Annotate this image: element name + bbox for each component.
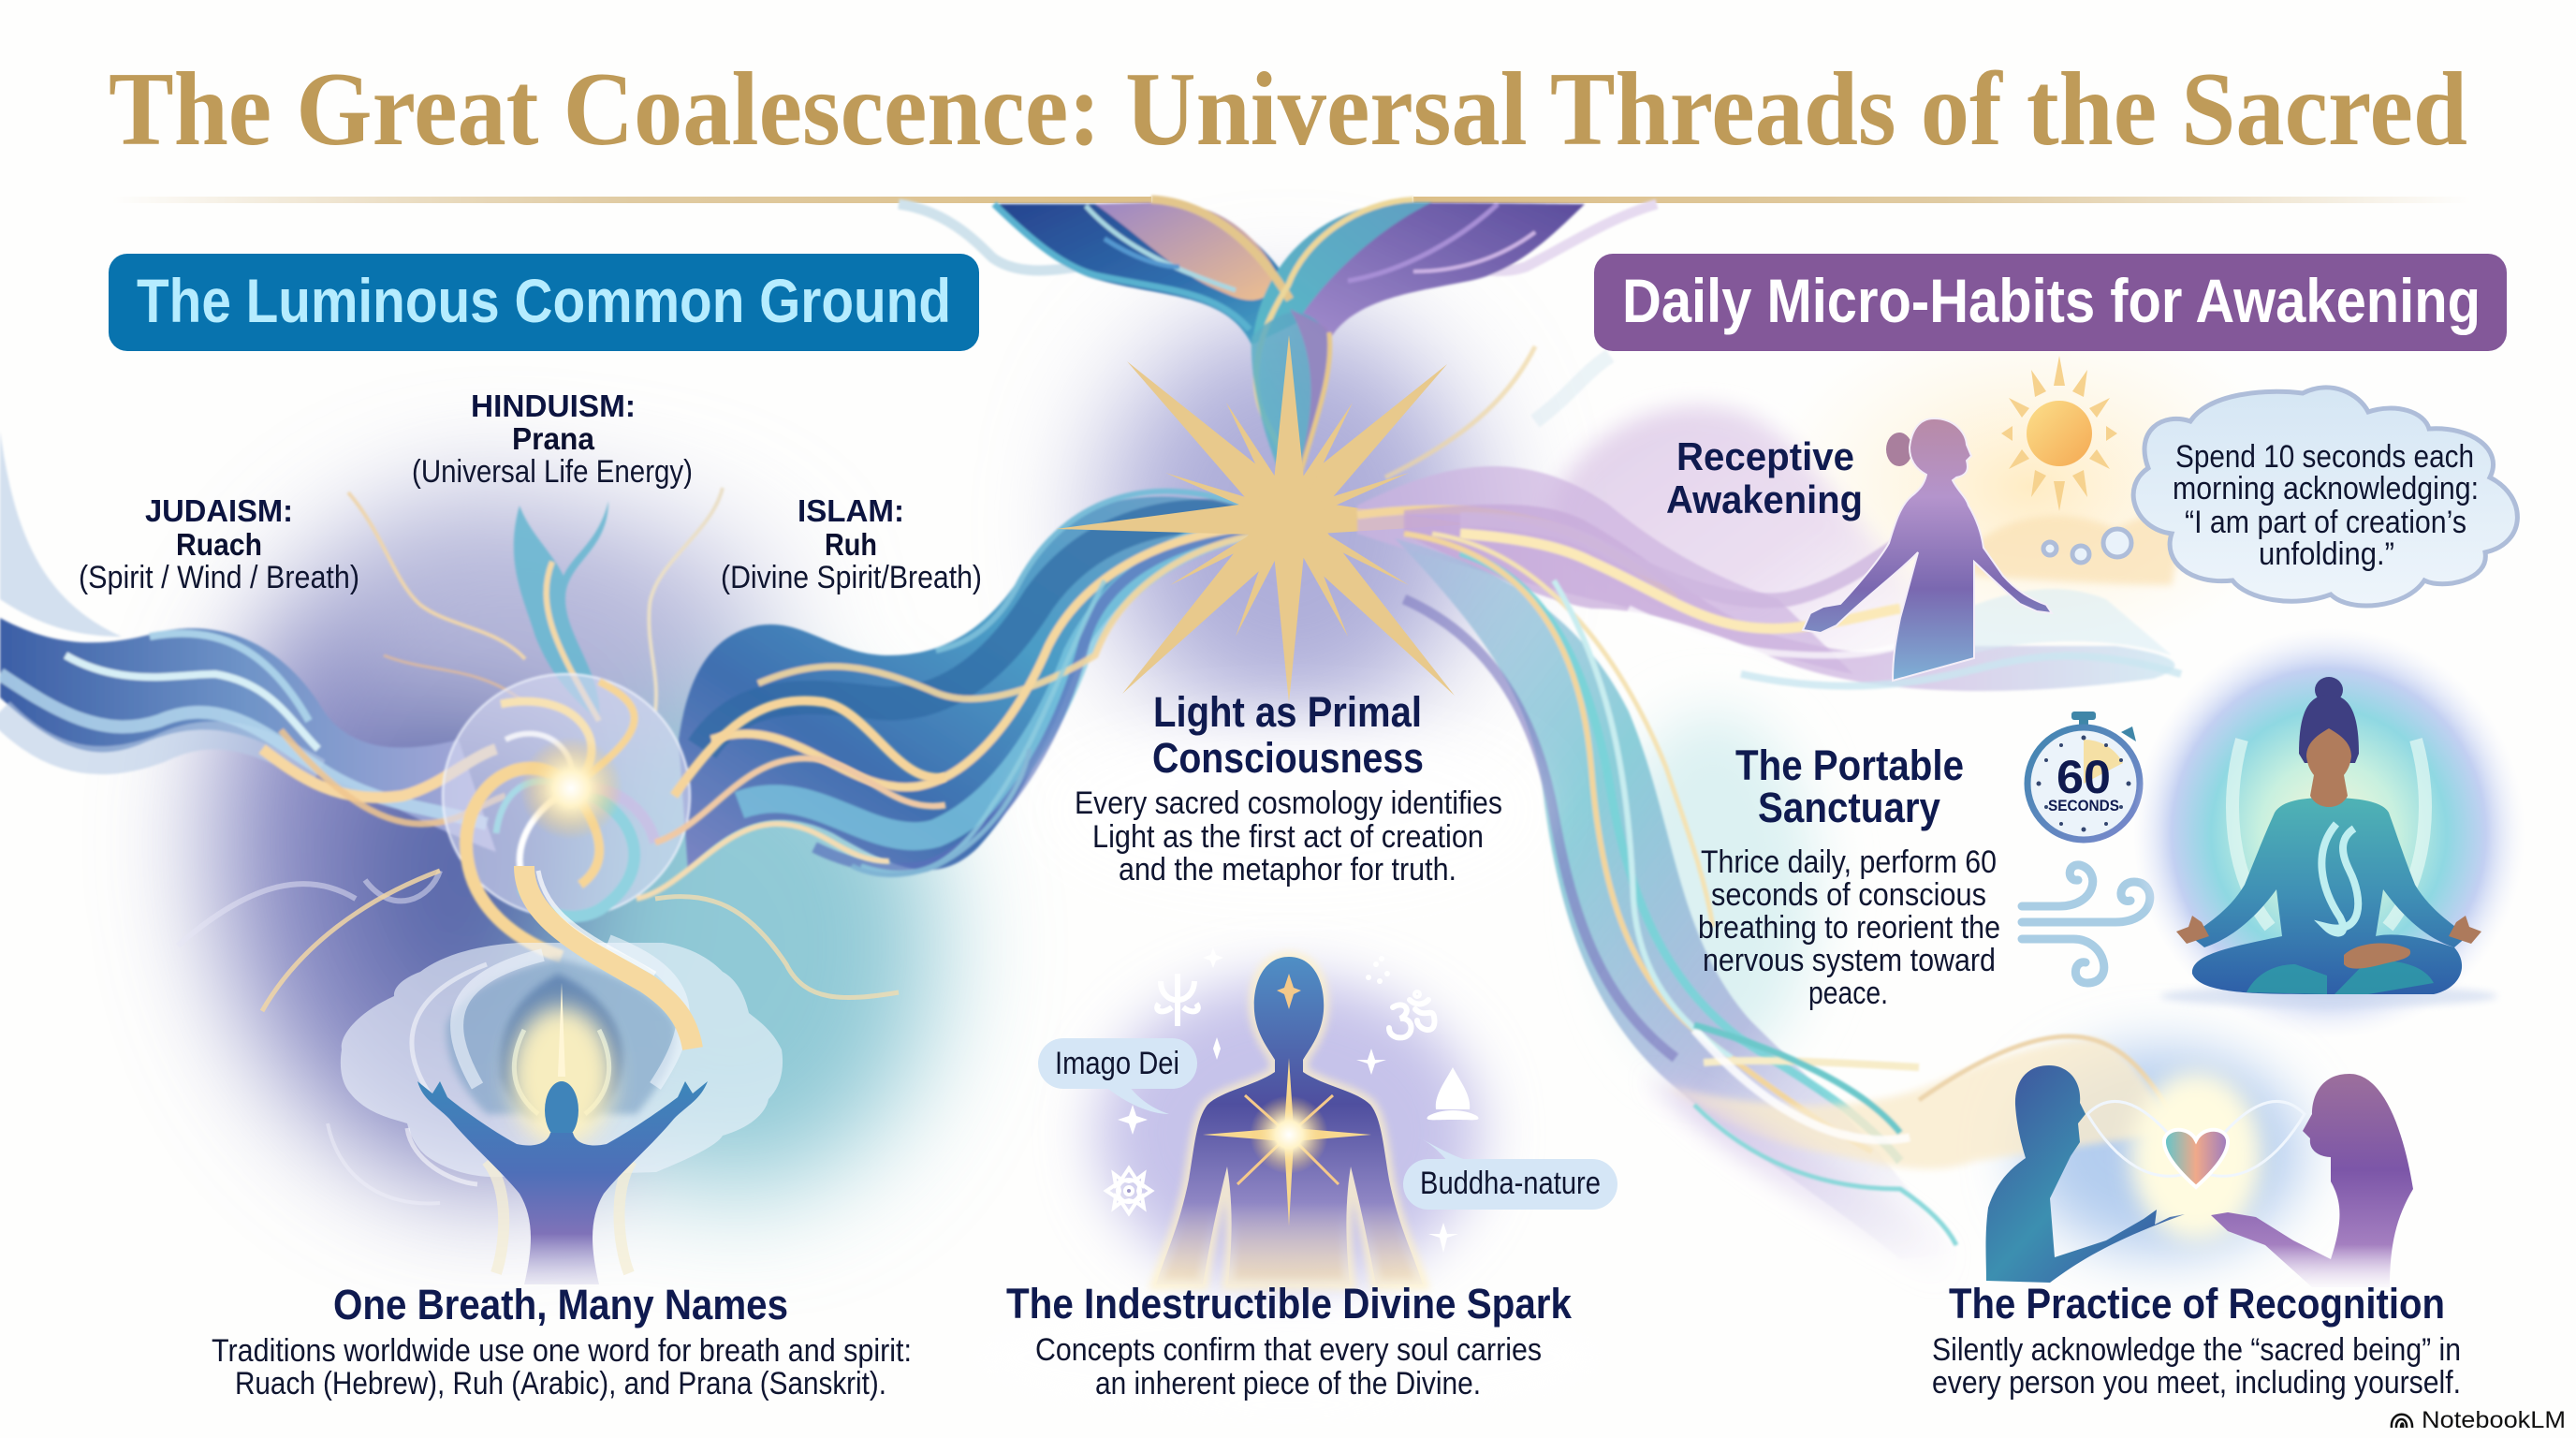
heading: receptive awakening: Awakening xyxy=(1666,477,1863,521)
text block: portable sanctuary: nervous system toward xyxy=(1703,943,1996,978)
icon: heart xyxy=(2164,1130,2228,1187)
text block: practice of recognition xyxy=(1932,1280,2461,1401)
text block: portable sanctuary: Thrice daily, perform 60 xyxy=(1701,844,1997,880)
label: Hinduism: Prana xyxy=(512,421,595,456)
text block: light as primal consciousness xyxy=(1075,688,1502,888)
callout: thought cloud: morning acknowledging: xyxy=(2173,471,2479,506)
callout: Buddha-nature xyxy=(1403,1137,1617,1210)
label: Hinduism: HINDUISM: xyxy=(471,389,636,423)
background glow: left breath panel xyxy=(215,496,936,1189)
icon: forehead star xyxy=(1277,974,1301,1009)
icon: meditating figure xyxy=(2132,627,2525,1039)
label: Islam: ISLAM: xyxy=(798,493,904,528)
icon: sun xyxy=(2001,356,2117,511)
icon: recognition heart with two figures xyxy=(1986,1065,2413,1287)
icon: figure with raised arms xyxy=(417,983,708,1284)
text block: divine spark: The Indestructible Divine Spark xyxy=(1006,1280,1573,1328)
background glow: recognition xyxy=(2022,1049,2303,1255)
central star of light xyxy=(1056,335,1471,703)
icon: man silhouette xyxy=(1986,1065,2185,1283)
ribbons: top woven threads converging xyxy=(899,199,1657,496)
text block: one breath many names: Traditions worldwide use one word for breath and spirit: xyxy=(212,1333,912,1369)
text block: divine spark xyxy=(980,1280,1598,1414)
icon: connecting energy loops xyxy=(2087,1101,2305,1176)
label: Islam: (Divine Spirit/Breath) xyxy=(721,560,982,595)
ribbons: flow into recognition xyxy=(1647,1025,2172,1287)
gold divider line xyxy=(112,197,2471,203)
panel: divine spark xyxy=(980,947,1617,1414)
background glow: sanctuary teal wash xyxy=(1610,712,1816,1067)
label: Hinduism: (Universal Life Energy) xyxy=(412,454,693,490)
veils: breath cloud around figure xyxy=(178,866,899,1273)
heading: receptive awakening: Receptive xyxy=(1676,434,1854,478)
text block: one breath many names: Ruach (Hebrew), Ruh (Arabic), and Prana (Sanskrit). xyxy=(235,1366,886,1401)
label: Islam xyxy=(721,493,982,595)
text block: portable sanctuary: Sanctuary xyxy=(1758,784,1940,831)
heading: receptive awakening xyxy=(1666,434,1863,521)
icon: woman silhouette xyxy=(2211,1074,2413,1287)
icon: 60 second stopwatch: 60 xyxy=(2056,751,2111,803)
label: Judaism xyxy=(79,493,359,595)
swirl of breath xyxy=(443,674,945,957)
label: Hinduism xyxy=(412,389,693,490)
ribbons: star out to right xyxy=(1357,346,1928,674)
background glow: inner spark xyxy=(1097,978,1481,1287)
panel: luminous common ground xyxy=(79,254,982,1401)
text block: light as primal consciousness: and the metaphor for truth. xyxy=(1119,852,1456,888)
text block: divine spark: an inherent piece of the Divine. xyxy=(1095,1366,1481,1401)
label: Judaism: JUDAISM: xyxy=(145,493,293,528)
wash: lavender sky behind receptive awakening xyxy=(1551,406,1928,674)
icon: human figure xyxy=(1156,957,1423,1284)
icon: sparkles xyxy=(1118,947,1458,1253)
text block: light as primal consciousness: Light as the first act of creation xyxy=(1092,819,1484,855)
ribbons: descending teal threads xyxy=(1395,534,1956,1259)
callout: Imago Dei: Imago Dei xyxy=(1055,1046,1179,1081)
icon: trident symbol xyxy=(1157,974,1198,1026)
icon: heart spark xyxy=(1203,1058,1371,1226)
heading text: right: Daily Micro-Habits for Awakening xyxy=(1622,266,2481,335)
text block: portable sanctuary: The Portable xyxy=(1735,741,1964,789)
text block: light as primal consciousness: Light as Primal xyxy=(1153,688,1422,736)
icon: om symbol xyxy=(1389,992,1434,1037)
callout: thought cloud xyxy=(2133,388,2517,606)
brand: NotebookLM: NotebookLM xyxy=(2422,1407,2566,1433)
icon: 60 second stopwatch: SECONDS xyxy=(2048,797,2119,814)
title: The Great Coalescence: Universal Threads of the Sacred xyxy=(109,51,2467,168)
label: Judaism: (Spirit / Wind / Breath) xyxy=(79,560,359,595)
icon: lotus wheel xyxy=(1106,1168,1151,1213)
ribbons: left edge flow into swirl xyxy=(0,431,505,852)
text block: portable sanctuary: peace. xyxy=(1808,976,1888,1011)
icon: receptive woman xyxy=(1803,418,2052,681)
text block: practice of recognition: Silently acknowledge the “sacred being” in xyxy=(1932,1332,2461,1368)
text halo behind primal light xyxy=(1046,726,1532,894)
text block: light as primal consciousness: Consciousness xyxy=(1152,734,1424,782)
heading bar: left xyxy=(109,254,979,351)
heading text: left: The Luminous Common Ground xyxy=(137,266,951,335)
heading bar: right xyxy=(1594,254,2507,351)
text block: one breath many names: One Breath, Many Names xyxy=(333,1281,788,1328)
callout: thought cloud: “I am part of creation’s xyxy=(2185,505,2466,540)
text block: portable sanctuary: seconds of conscious xyxy=(1711,877,1986,913)
text block: divine spark: Concepts confirm that every soul carries xyxy=(1035,1332,1542,1368)
callout: Buddha-nature: Buddha-nature xyxy=(1420,1166,1601,1201)
flame: prana wisps above the swirl xyxy=(348,488,723,721)
callout: Imago Dei xyxy=(1038,1038,1197,1114)
text block: portable sanctuary xyxy=(1698,741,2000,1011)
text block: practice of recognition: The Practice of Recognition xyxy=(1949,1280,2445,1328)
panel: daily micro-habits xyxy=(1594,254,2525,1401)
icon: breath wind xyxy=(2022,865,2150,983)
callout: thought cloud: Spend 10 seconds each xyxy=(2175,439,2474,475)
background glow: morning warmth xyxy=(1760,309,2303,665)
icon: thought bubbles xyxy=(2043,529,2131,563)
background glow: central light xyxy=(1102,318,1476,730)
callout: thought cloud: unfolding.” xyxy=(2259,536,2394,572)
text block: practice of recognition: every person you meet, including yourself. xyxy=(1932,1365,2461,1401)
label: Judaism: Ruach xyxy=(176,527,262,562)
icon: seated buddha xyxy=(1427,1067,1479,1120)
text block: portable sanctuary: breathing to reorient the xyxy=(1698,910,2000,946)
label: Islam: Ruh xyxy=(825,527,877,562)
text block: one breath many names xyxy=(212,1281,912,1401)
scene: hills xyxy=(1966,516,2181,585)
text block: light as primal consciousness: Every sacred cosmology identifies xyxy=(1075,785,1502,821)
icon: 60 second stopwatch xyxy=(2027,712,2140,840)
ribbons: central star to left swirl xyxy=(679,492,1282,874)
icon: glowing body outline xyxy=(1156,957,1423,1284)
ribbons: receptive awakening waves xyxy=(1404,505,2181,691)
